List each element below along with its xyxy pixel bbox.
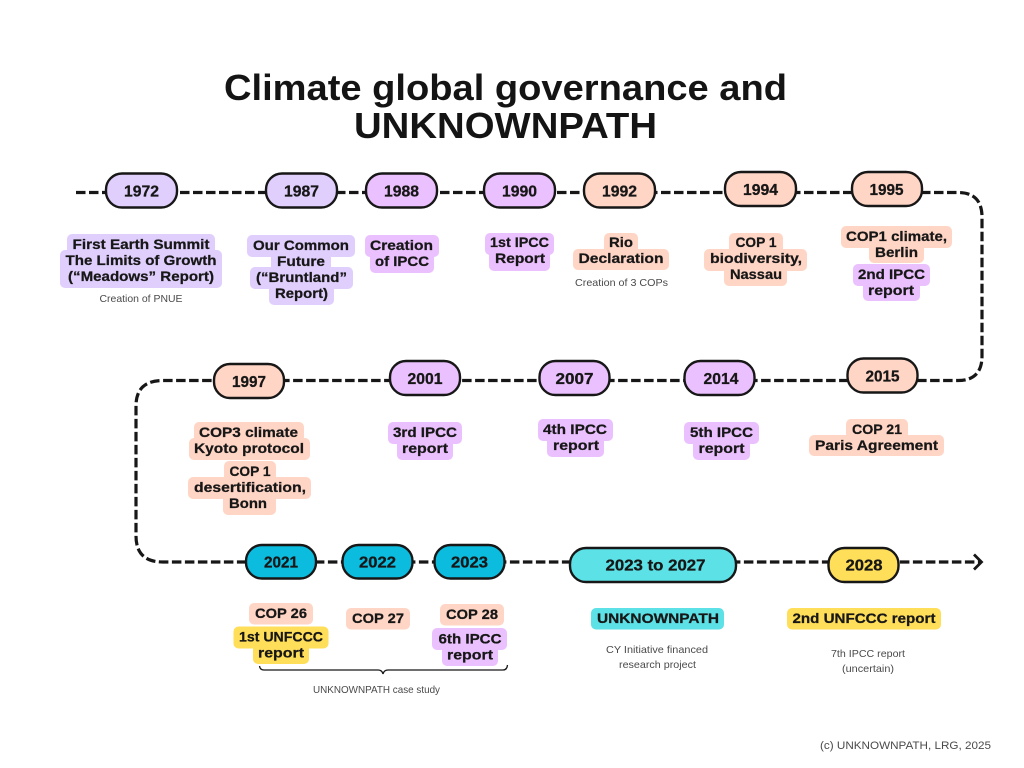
year 2022: 2022 <box>359 554 396 572</box>
chip: 6th IPCC report: 6th IPCC <box>438 630 502 646</box>
year 1995 <box>852 172 922 206</box>
chip: 2nd IPCC report: report <box>868 282 914 298</box>
event 2022: COP 27 <box>346 608 410 630</box>
timeline dashed path <box>76 192 982 562</box>
note: 7th IPCC report uncertain: 7th IPCC report <box>831 648 905 660</box>
event 2014: 5th IPCC report: report <box>698 440 745 456</box>
note: CY Initiative financed research project <box>606 644 708 671</box>
chip: COP1 climate, Berlin <box>841 226 952 263</box>
period 2023 to 2027 <box>570 548 736 582</box>
event 1995: COP1 climate and 2nd IPCC report <box>841 226 952 301</box>
chip: COP 28: COP 28 <box>446 606 498 622</box>
year 1992 <box>584 174 655 208</box>
year 1988: 1988 <box>384 184 419 200</box>
event 2007: 4th IPCC report: 4th IPCC <box>543 421 607 437</box>
event 2001: 3rd IPCC report: report <box>402 440 448 456</box>
year 1972: 1972 <box>124 184 159 200</box>
chip: 2nd IPCC report <box>853 264 930 301</box>
event 1994: COP 1 biodiversity: biodiversity, <box>710 250 802 266</box>
event 2023: COP 28 and 6th IPCC report <box>432 604 507 666</box>
year 2023: 2023 <box>451 554 488 572</box>
title <box>224 67 787 146</box>
event 2001: 3rd IPCC report <box>388 422 462 460</box>
event 1972: First Earth Summit: (“Meadows” Report) <box>68 268 214 284</box>
event 2015: COP 21 Paris Agreement: COP 21 <box>852 421 902 437</box>
year 2015: 2015 <box>866 368 900 386</box>
chip: COP1 climate, Berlin: COP1 climate, <box>846 228 947 244</box>
note: 7th IPCC report uncertain: (uncertain) <box>842 663 894 675</box>
chip: 6th IPCC report <box>432 628 507 666</box>
event 1987: Our Common Future: Report) <box>275 285 328 301</box>
event: UNKNOWNPATH project: UNKNOWNPATH <box>597 610 719 626</box>
event 2021: COP 26 and 1st UNFCCC report <box>234 603 328 664</box>
year 2001: 2001 <box>408 371 443 388</box>
event 1972: First Earth Summit <box>60 234 222 288</box>
year 1994: 1994 <box>743 182 778 199</box>
event 1988: Creation of IPCC: of IPCC <box>375 253 429 269</box>
year 1990 <box>484 174 555 208</box>
event 2015: COP 21 Paris Agreement <box>809 419 944 456</box>
year 2021 <box>246 545 316 578</box>
event 1992: Rio Declaration: Declaration <box>578 250 664 266</box>
chip: COP 1 desertification, Bonn: Bonn <box>229 495 267 511</box>
chip: COP 1 desertification, Bonn: desertification, <box>194 479 306 495</box>
year 1987 <box>266 174 337 208</box>
year 1972 <box>106 174 177 208</box>
event 2001: 3rd IPCC report: 3rd IPCC <box>393 424 457 440</box>
year 1990: 1990 <box>502 184 537 200</box>
chip: 2nd IPCC report: 2nd IPCC <box>858 266 925 282</box>
year 2022 <box>342 545 412 578</box>
event 1990: 1st IPCC Report <box>485 233 554 271</box>
event 1992: Rio Declaration <box>573 233 669 270</box>
event 1990: 1st IPCC Report: 1st IPCC <box>490 234 549 250</box>
year 2015 <box>848 358 918 392</box>
year 2028 <box>828 548 898 582</box>
year 2007 <box>540 361 610 395</box>
event 2014: 5th IPCC report <box>684 422 759 460</box>
event 1987: Our Common Future <box>247 235 355 305</box>
event 1988: Creation of IPCC: Creation <box>370 237 433 253</box>
copyright: (c) UNKNOWNPATH, LRG, 2025 <box>820 740 991 752</box>
chip: COP 1 desertification, Bonn: COP 1 <box>230 463 271 479</box>
note: 7th IPCC report uncertain <box>831 648 905 675</box>
title: Climate global governance and <box>224 67 787 108</box>
event 1987: Our Common Future: Future <box>277 253 325 269</box>
chip: COP1 climate, Berlin: Berlin <box>875 244 918 260</box>
arrow head <box>974 554 982 570</box>
year 1997 <box>214 364 284 398</box>
event 1988: Creation of IPCC <box>365 235 439 273</box>
year 2021: 2021 <box>264 554 298 572</box>
year 2007: 2007 <box>556 371 594 388</box>
note: Creation of 3 COPs: Creation of 3 COPs <box>575 277 668 289</box>
event 2022: COP 27: COP 27 <box>352 610 404 626</box>
event 2028: 2nd UNFCCC report <box>787 608 941 630</box>
year 1988 <box>366 174 437 208</box>
note: CY Initiative financed research project: research project <box>619 659 696 671</box>
period 2023 to 2027: 2023 to 2027 <box>606 558 706 574</box>
event 1987: Our Common Future: (“Bruntland” <box>256 269 347 285</box>
year 1994 <box>725 172 796 206</box>
event 1997: COP3 climate and COP 1 desertification <box>188 422 311 515</box>
event 2014: 5th IPCC report: 5th IPCC <box>690 424 753 440</box>
year 2023 <box>434 545 504 578</box>
chip: COP3 climate Kyoto protocol: Kyoto protocol <box>194 440 304 456</box>
chip: COP3 climate Kyoto protocol <box>189 422 310 460</box>
event 1972: First Earth Summit: First Earth Summit <box>72 236 210 252</box>
chip: 1st UNFCCC report: 1st UNFCCC <box>239 628 323 644</box>
note: CY Initiative financed research project: CY Initiative financed <box>606 644 708 656</box>
event 2015: COP 21 Paris Agreement: Paris Agreement <box>815 437 938 453</box>
event 1990: 1st IPCC Report: Report <box>495 250 545 266</box>
chip: 1st UNFCCC report: report <box>258 644 304 660</box>
note: Creation of PNUE: Creation of PNUE <box>100 293 182 305</box>
chip: COP3 climate Kyoto protocol: COP3 climate <box>199 424 298 440</box>
event 2007: 4th IPCC report <box>538 419 613 457</box>
event 2028: 2nd UNFCCC report: 2nd UNFCCC report <box>792 610 936 626</box>
year 1987: 1987 <box>284 184 319 200</box>
year 2014: 2014 <box>704 371 739 388</box>
note: UNKNOWNPATH case study: UNKNOWNPATH case study <box>313 684 441 696</box>
year 1992: 1992 <box>602 184 637 200</box>
chip: 1st UNFCCC report <box>234 626 328 664</box>
title: UNKNOWNPATH <box>354 105 657 146</box>
event 1994: COP 1 biodiversity <box>704 233 807 286</box>
event 1994: COP 1 biodiversity: Nassau <box>730 266 782 282</box>
year 1997: 1997 <box>232 374 266 391</box>
brace: case study span <box>260 665 508 674</box>
event 1992: Rio Declaration: Rio <box>609 234 633 250</box>
event 1972: First Earth Summit: The Limits of Growth <box>66 252 216 268</box>
event 1987: Our Common Future: Our Common <box>253 237 349 253</box>
event 1994: COP 1 biodiversity: COP 1 <box>736 234 777 250</box>
year 2028: 2028 <box>846 558 883 574</box>
chip: COP 26: COP 26 <box>255 605 307 621</box>
year 1995: 1995 <box>870 182 904 199</box>
event 2007: 4th IPCC report: report <box>553 437 599 453</box>
year 2014 <box>684 361 754 395</box>
chip: COP 1 desertification, Bonn <box>188 461 311 515</box>
chip: 6th IPCC report: report <box>447 646 493 662</box>
year 2001 <box>390 361 460 395</box>
event: UNKNOWNPATH project <box>591 608 724 630</box>
